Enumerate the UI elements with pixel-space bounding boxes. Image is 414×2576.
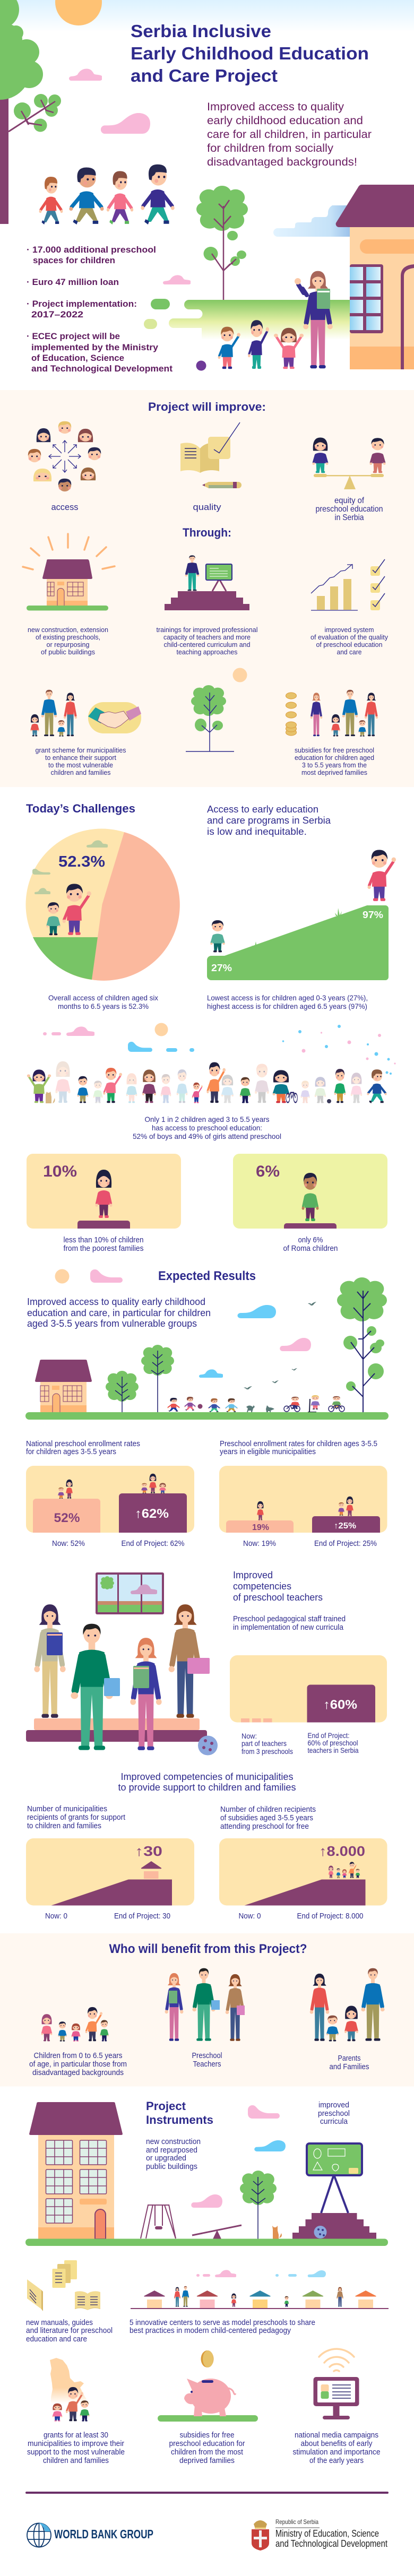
- card: 6% Roma children: [233, 1154, 387, 1229]
- bar chart: eligible municipalities: [219, 1466, 387, 1533]
- chart: access hill: [207, 850, 396, 980]
- value: 6%: 6%: [256, 1163, 280, 1180]
- project key facts: implemented by the Ministry: [31, 342, 159, 352]
- logo: Ministry of Education, Science and Technological Development: Republic of Serbia: [275, 2518, 318, 2526]
- icon: coins and family: [286, 690, 378, 737]
- label: teachers end of project: [308, 1731, 359, 1754]
- label: national enrollment: [26, 1439, 140, 1456]
- value: 10%: 10%: [43, 1163, 77, 1180]
- cloud: blue behind house: [273, 205, 355, 237]
- caption: less than 10%: less than 10% of children: [64, 1235, 143, 1244]
- illustration: row of children: [27, 1061, 392, 1103]
- sky gradient: [0, 0, 414, 32]
- cloud: pink large: [101, 113, 150, 134]
- ground: gradient grass: [144, 299, 350, 340]
- bar chart: eligible municipalities: 19%: [252, 1523, 269, 1532]
- cloud: pink near bullets: [163, 275, 191, 284]
- decor: clouds and bubbles above children: [43, 1023, 396, 1065]
- text: subsidies: education for children aged: [295, 754, 374, 762]
- icon: family and handshake: [30, 690, 141, 737]
- text: improved curricula: [318, 2100, 350, 2126]
- intro text: for children from socially: [207, 142, 334, 154]
- chart: subsidies ramp: [219, 1838, 387, 1905]
- caption: subsidies: preschool education for: [169, 2439, 245, 2448]
- label: teachers end of project: End of Project:: [308, 1731, 349, 1740]
- text: evaluation: of evaluation of the quality: [310, 633, 388, 641]
- chart: municipalities ramp: [26, 1838, 194, 1905]
- label: eligible municipalities: years in eligible municipalities: [220, 1447, 316, 1456]
- label: equity: equity of: [334, 496, 365, 505]
- caption: children: [29, 2051, 127, 2077]
- label: municipalities grants: [27, 1804, 126, 1830]
- caption: children: Children from 0 to 6.5 years: [34, 2051, 122, 2060]
- icon: Serbia map and children: [50, 2358, 90, 2422]
- label: equity: preschool education: [315, 505, 383, 514]
- label: subsidy recipients: of subsidies aged 3-5.5 years: [220, 1813, 313, 1822]
- label: national enrollment: National preschool enrollment rates: [26, 1439, 140, 1448]
- text: access low: Access to early education: [207, 804, 318, 815]
- heading: project instruments: [146, 2099, 213, 2127]
- illustration: playground: [25, 2105, 388, 2246]
- caption: preschool teachers: Preschool: [192, 2051, 222, 2060]
- caption: preschool teachers: Teachers: [193, 2060, 221, 2069]
- logo: Ministry of Education, Science and Technological Development: and Technological Development: [275, 2538, 387, 2549]
- project key facts: and Technological Development: [31, 364, 172, 374]
- text: competencies of teachers: in implementation of new curricula: [233, 1623, 344, 1632]
- text: trainings: trainings for improved professional: [156, 626, 258, 634]
- caption: 1 in 2 children: [133, 1115, 281, 1140]
- heading: today's challenges: Today’s Challenges: [26, 802, 135, 815]
- labels: enrollment now and end: [52, 1539, 377, 1548]
- project key facts: · ECEC project will be: [27, 331, 120, 341]
- bar chart: teachers trained: [230, 1655, 387, 1723]
- label: subsidy recipients: attending preschool for free: [220, 1822, 309, 1831]
- caption: children: disadvantaged backgrounds: [32, 2068, 124, 2077]
- group: parents and families: [310, 1968, 385, 2041]
- caption: grants: grants for at least 30: [44, 2431, 108, 2440]
- heading: municipalities: Improved competencies of municipalities: [121, 1771, 293, 1782]
- caption: only 6%: [283, 1235, 338, 1253]
- caption: less than 10%: [64, 1235, 143, 1253]
- project key facts: spaces for children: [33, 255, 115, 265]
- caption: manuals: education and care: [26, 2335, 87, 2344]
- text: trainings: capacity of teachers and more: [163, 633, 251, 641]
- title: Serbia Inclusive: [131, 21, 271, 41]
- heading: municipalities: to provide support to children and families: [118, 1782, 296, 1793]
- text: access low: is low and inequitable.: [207, 826, 307, 837]
- caption: only 6%: of Roma children: [283, 1244, 338, 1253]
- text: grant scheme: to the most vulnerable: [48, 761, 113, 769]
- labels: ramps now and end: End of Project: 30: [114, 1912, 170, 1921]
- house: right: [336, 185, 414, 369]
- icon: equity seesaw: [312, 437, 386, 489]
- heading: project instruments: Project: [146, 2099, 186, 2113]
- heading: who will benefit: Who will benefit from this Project?: [109, 1942, 307, 1956]
- logo: World Bank Group: [27, 2523, 153, 2547]
- label: teachers now: part of teachers: [242, 1739, 287, 1748]
- intro text: care for all children, in particular: [207, 128, 372, 141]
- text: trainings: [156, 626, 258, 656]
- label: teachers end of project: teachers in Serbia: [308, 1746, 359, 1754]
- group: teachers: [165, 1968, 245, 2041]
- label: quality: quality: [193, 502, 221, 512]
- text: subsidies: 3 to 5.5 years from the: [302, 761, 367, 769]
- caption: lowest access: highest access is for children aged 6.5 years (97%): [207, 1002, 367, 1010]
- caption: media campaigns: national media campaigns: [295, 2431, 378, 2440]
- label: equity: [315, 496, 383, 522]
- text: access low: [207, 804, 331, 837]
- tree: centre: [196, 186, 248, 300]
- caption: grants: support to the most vulnerable: [27, 2448, 125, 2457]
- caption: media campaigns: of the early years: [309, 2456, 364, 2465]
- text: construction: of existing preschools,: [36, 633, 100, 641]
- caption: manuals: and literature for preschool: [26, 2326, 113, 2335]
- intro text: [207, 101, 372, 168]
- text: improved curricula: improved: [318, 2100, 349, 2110]
- text: competencies of teachers: of preschool teachers: [233, 1592, 323, 1603]
- label: municipalities grants: to children and families: [27, 1821, 101, 1830]
- text: improved curricula: preschool: [318, 2109, 350, 2118]
- card: 10% poorest families: [27, 1154, 181, 1229]
- text: evaluation: improved system: [325, 626, 374, 634]
- label: subsidy recipients: Number of children recipients: [220, 1805, 316, 1814]
- cloud: pink small: [69, 69, 103, 81]
- label: access: access: [51, 502, 79, 512]
- caption: parents: Parents: [338, 2054, 361, 2063]
- project key facts: [27, 245, 172, 374]
- labels: ramps now and end: [45, 1912, 363, 1921]
- label: national enrollment: for children ages 3-5.5 years: [26, 1447, 116, 1456]
- icon: piggy bank: [158, 2350, 258, 2422]
- panel: project will improve: [0, 390, 414, 787]
- illustration: five innovative centers: [131, 2270, 389, 2309]
- labels: ramps now and end: Now: 0: [45, 1912, 67, 1921]
- bar chart: teachers trained: ↑60%: [323, 1698, 357, 1712]
- tree: top left: [0, 0, 61, 224]
- caption: children: of age, in particular those from: [29, 2060, 127, 2069]
- caption: subsidies: deprived families: [179, 2456, 235, 2465]
- project key facts: 2017–2022: [31, 309, 83, 319]
- children walking: [39, 165, 175, 224]
- caption: preschool teachers: [192, 2051, 222, 2069]
- heading: expected results: [55, 1269, 256, 1283]
- label: eligible municipalities: Preschool enrollment rates for children ages 3-5.5: [220, 1439, 377, 1448]
- text: improved access: aged 3-5.5 years from vulnerable groups: [27, 1318, 197, 1329]
- project key facts: · 17.000 additional preschool: [27, 245, 156, 255]
- bar chart: national enrollment: [26, 1466, 194, 1533]
- icon: teacher training podium: [165, 555, 249, 610]
- illustration: park scene: [25, 1277, 389, 1420]
- labels: enrollment now and end: Now: 52%: [52, 1539, 85, 1548]
- ball: [196, 361, 206, 370]
- caption: lowest access: [207, 993, 368, 1010]
- text: new construction: new construction: [146, 2137, 201, 2146]
- value: 97%: 97%: [363, 910, 383, 920]
- caption: subsidies: [169, 2431, 245, 2465]
- title: and Care Project: [131, 66, 278, 85]
- caption: overall access: months to 6.5 years is 52.3%: [58, 1002, 149, 1010]
- text: evaluation: [310, 626, 388, 656]
- project key facts: of Education, Science: [31, 353, 124, 363]
- label: equity: in Serbia: [334, 513, 364, 522]
- caption: 1 in 2 children: has access to preschool education:: [152, 1123, 262, 1132]
- illustration: teachers on platform: [26, 1572, 218, 1756]
- logo: Ministry of Education, Science and Technological Development: Ministry of Education, Science: [275, 2528, 379, 2539]
- decorative tree and sun: [186, 668, 247, 751]
- heading: expected results: Expected Results: [158, 1269, 256, 1283]
- caption: media campaigns: stimulation and importance: [293, 2448, 380, 2457]
- heading: municipalities: [118, 1771, 296, 1793]
- children and teacher waving: [218, 271, 333, 369]
- chart: subsidies ramp: ↑8.000: [319, 1843, 365, 1859]
- icon: quality: [180, 422, 242, 488]
- bar chart: national enrollment: ↑62%: [135, 1507, 169, 1521]
- text: improved access: [27, 1296, 211, 1329]
- caption: parents: [329, 2054, 369, 2071]
- logo: World Bank Group: WORLD BANK GROUP: [54, 2527, 153, 2541]
- intro text: Improved access to quality: [207, 101, 344, 113]
- text: improved curricula: curricula: [320, 2117, 348, 2126]
- project key facts: · Project implementation:: [27, 299, 137, 309]
- caption: 1 in 2 children: Only 1 in 2 children aged 3 to 5.5 years: [144, 1115, 270, 1123]
- labels: ramps now and end: End of Project: 8.000: [297, 1912, 363, 1921]
- caption: lowest access: Lowest access is for children aged 0-3 years (27%),: [207, 993, 368, 1002]
- value: 27%: 27%: [211, 963, 232, 973]
- panel: who will benefit: [0, 1933, 414, 2087]
- text: evaluation: and care: [337, 648, 362, 656]
- caption: grants: children and families: [43, 2456, 109, 2465]
- icon: new construction house: [23, 534, 115, 610]
- chart: municipalities ramp: ↑30: [135, 1843, 162, 1859]
- bar chart: eligible municipalities: ↑25%: [334, 1522, 356, 1531]
- text: new construction: and repurposed: [146, 2146, 197, 2155]
- caption: parents: and Families: [329, 2062, 369, 2071]
- title: Early Childhood Education: [131, 44, 369, 63]
- text: competencies of teachers: Preschool pedagogical staff trained: [233, 1614, 346, 1623]
- text: grant scheme: [35, 746, 126, 776]
- text: new construction: or upgraded: [146, 2154, 186, 2163]
- text: construction: [28, 626, 108, 656]
- text: subsidies: subsidies for free preschool: [295, 746, 374, 754]
- label: teachers now: [242, 1732, 293, 1756]
- text: new construction: [146, 2137, 201, 2171]
- labels: enrollment now and end: Now: 19%: [243, 1539, 276, 1548]
- text: construction: new construction, extension: [28, 626, 108, 634]
- label: municipalities grants: recipients of grants for support: [27, 1813, 126, 1822]
- caption: less than 10%: from the poorest families: [64, 1244, 143, 1253]
- icon: access: [28, 421, 101, 491]
- caption: overall access: [48, 993, 158, 1010]
- label: teachers now: Now:: [242, 1732, 257, 1740]
- caption: grants: municipalities to improve their: [28, 2439, 124, 2448]
- text: trainings: child-centered curriculum and: [163, 641, 251, 649]
- labels: enrollment now and end: End of Project: 25%: [314, 1539, 377, 1548]
- text: competencies of teachers: Improved: [233, 1570, 273, 1580]
- caption: subsidies: children from the most: [171, 2448, 244, 2457]
- sun: [55, 0, 102, 25]
- group: children: [41, 2007, 109, 2042]
- labels: enrollment now and end: End of Project: 62%: [121, 1539, 185, 1548]
- caption: manuals: [26, 2318, 113, 2344]
- label: subsidy recipients: [220, 1805, 316, 1831]
- icon: media monitor: [313, 2349, 359, 2419]
- caption: innovative centers: best practices in modern child-centered pedagogy: [130, 2326, 291, 2335]
- caption: manuals: new manuals, guides: [26, 2318, 93, 2327]
- text: improved access: Improved access to quality early childhood: [27, 1296, 205, 1307]
- heading: project will improve: Project will improve:: [148, 400, 266, 413]
- logo: Ministry of Education, Science and Technological Development: [252, 2518, 387, 2551]
- text: new construction: public buildings: [146, 2162, 197, 2171]
- text: grant scheme: grant scheme for municipalities: [35, 746, 126, 754]
- label: teachers end of project: 60% of preschool: [308, 1739, 358, 1747]
- text: grant scheme: to enhance their support: [45, 754, 116, 762]
- labels: ramps now and end: Now: 0: [239, 1912, 261, 1921]
- intro text: disadvantaged backgrounds!: [207, 156, 357, 168]
- text: competencies of teachers: competencies: [233, 1581, 291, 1592]
- icon: evaluation chart: [311, 559, 385, 610]
- caption: media campaigns: about benefits of early: [300, 2439, 373, 2448]
- pie chart: 52.3%: [25, 829, 180, 981]
- illustration: hero scene background: [0, 0, 414, 370]
- label: teachers now: from 3 preschools: [242, 1747, 293, 1756]
- text: construction: of public buildings: [41, 648, 95, 656]
- value: 52.3%: 52.3%: [58, 853, 105, 870]
- icon: manuals and books: [27, 2260, 100, 2311]
- text: grant scheme: children and families: [51, 768, 111, 776]
- text: evaluation: of preschool education: [316, 641, 382, 649]
- label: municipalities grants: Number of municipalities: [27, 1804, 107, 1813]
- heading: project instruments: Instruments: [146, 2113, 213, 2127]
- text: competencies of teachers: [233, 1570, 346, 1632]
- intro text: early childhood education and: [207, 115, 363, 127]
- heading: through: Through:: [183, 526, 231, 539]
- text: subsidies: [295, 746, 374, 776]
- text: construction: or repurposing: [47, 641, 89, 649]
- caption: grants: [27, 2431, 125, 2465]
- caption: subsidies: subsidies for free: [179, 2431, 235, 2440]
- caption: innovative centers: 5 innovative centers to serve as model preschools to share: [130, 2318, 315, 2327]
- text: subsidies: most deprived families: [301, 768, 367, 776]
- caption: 1 in 2 children: 52% of boys and 49% of girls attend preschool: [133, 1132, 281, 1140]
- title: [131, 21, 369, 85]
- bar chart: national enrollment: 52%: [54, 1511, 80, 1525]
- project key facts: · Euro 47 million loan: [27, 277, 119, 287]
- caption: overall access: Overall access of children aged six: [48, 993, 158, 1002]
- illustration: building: [29, 2102, 123, 2239]
- caption: innovative centers: [130, 2318, 315, 2335]
- window: [96, 1572, 164, 1614]
- text: improved access: education and care, in particular for children: [27, 1308, 211, 1318]
- caption: only 6%: only 6%: [298, 1235, 323, 1244]
- text: trainings: teaching approaches: [176, 648, 238, 656]
- caption: media campaigns: [293, 2431, 380, 2465]
- label: eligible municipalities: [220, 1439, 377, 1456]
- text: access low: and care programs in Serbia: [207, 815, 331, 826]
